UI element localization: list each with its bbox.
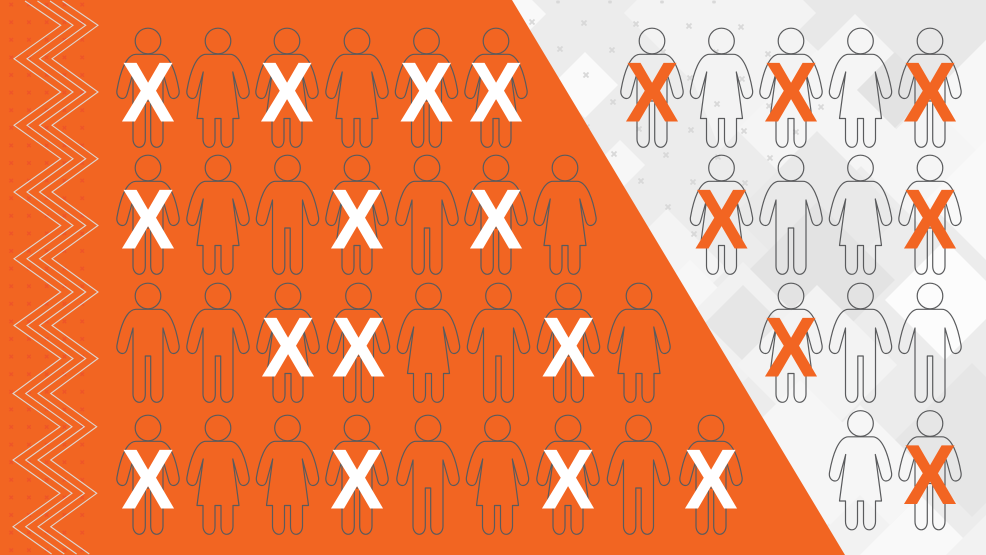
woman crossed out: X: [470, 46, 522, 140]
woman crossed out: [760, 283, 822, 402]
man crossed out: [537, 283, 600, 402]
woman crossed out: X: [765, 46, 817, 140]
man crossed out: [899, 411, 961, 530]
man crossed out: X: [685, 433, 737, 527]
man: [760, 155, 822, 274]
row 4 figures: [117, 411, 961, 534]
man crossed out: X: [904, 46, 956, 140]
man crossed out: [465, 155, 527, 274]
woman: [326, 28, 388, 147]
man crossed out: [680, 415, 742, 534]
dotted pattern on orange panel: [8, 0, 87, 555]
man crossed out: X: [122, 46, 174, 140]
man crossed out: [117, 415, 179, 534]
background: small grey x marks: [530, 1, 824, 236]
row 3 figures: [117, 283, 961, 402]
man crossed out: [395, 28, 458, 147]
woman crossed out: X: [765, 301, 817, 395]
woman crossed out: X: [262, 301, 314, 395]
woman: [829, 411, 892, 530]
man: [829, 283, 892, 402]
man crossed out: X: [122, 433, 174, 527]
man crossed out: [899, 28, 961, 147]
man: [187, 283, 249, 402]
row 1 figures: [117, 28, 961, 147]
man: [256, 155, 319, 274]
man: [397, 415, 459, 534]
woman crossed out: [465, 28, 527, 147]
man: [467, 283, 530, 402]
man: [117, 283, 179, 402]
woman: [534, 155, 596, 274]
woman crossed out: [760, 28, 822, 147]
man crossed out: X: [470, 173, 522, 267]
woman crossed out: [257, 283, 319, 402]
man crossed out: [326, 415, 388, 534]
woman crossed out: X: [331, 173, 383, 267]
woman crossed out: X: [696, 173, 747, 267]
woman: [187, 28, 249, 147]
woman: [256, 415, 319, 534]
man: [607, 415, 670, 534]
woman: [829, 155, 892, 274]
man: [396, 155, 458, 274]
zigzag lines: [13, 1, 98, 554]
man crossed out: [117, 155, 179, 274]
woman: [690, 28, 753, 147]
man crossed out: X: [904, 173, 956, 267]
woman: [397, 283, 460, 402]
man crossed out: [621, 28, 683, 147]
woman crossed out: [256, 28, 318, 147]
man: [899, 283, 961, 402]
woman: [829, 28, 892, 147]
woman crossed out: [537, 415, 599, 534]
woman: [608, 283, 670, 402]
woman: [187, 415, 249, 534]
man crossed out: X: [543, 301, 594, 395]
woman crossed out: [690, 155, 753, 274]
man crossed out: X: [401, 46, 452, 140]
man crossed out: [327, 283, 390, 402]
woman crossed out: [326, 155, 388, 274]
woman: [187, 155, 249, 274]
row 2 figures: [117, 155, 961, 274]
man crossed out: X: [904, 428, 956, 522]
man crossed out: X: [626, 46, 678, 140]
man crossed out: [899, 155, 961, 274]
man crossed out: X: [333, 301, 384, 395]
man crossed out: X: [122, 173, 174, 267]
woman: [466, 415, 529, 534]
man crossed out: X: [331, 433, 383, 527]
man crossed out: [117, 28, 179, 147]
woman crossed out: X: [542, 433, 594, 527]
woman crossed out: X: [261, 46, 313, 140]
